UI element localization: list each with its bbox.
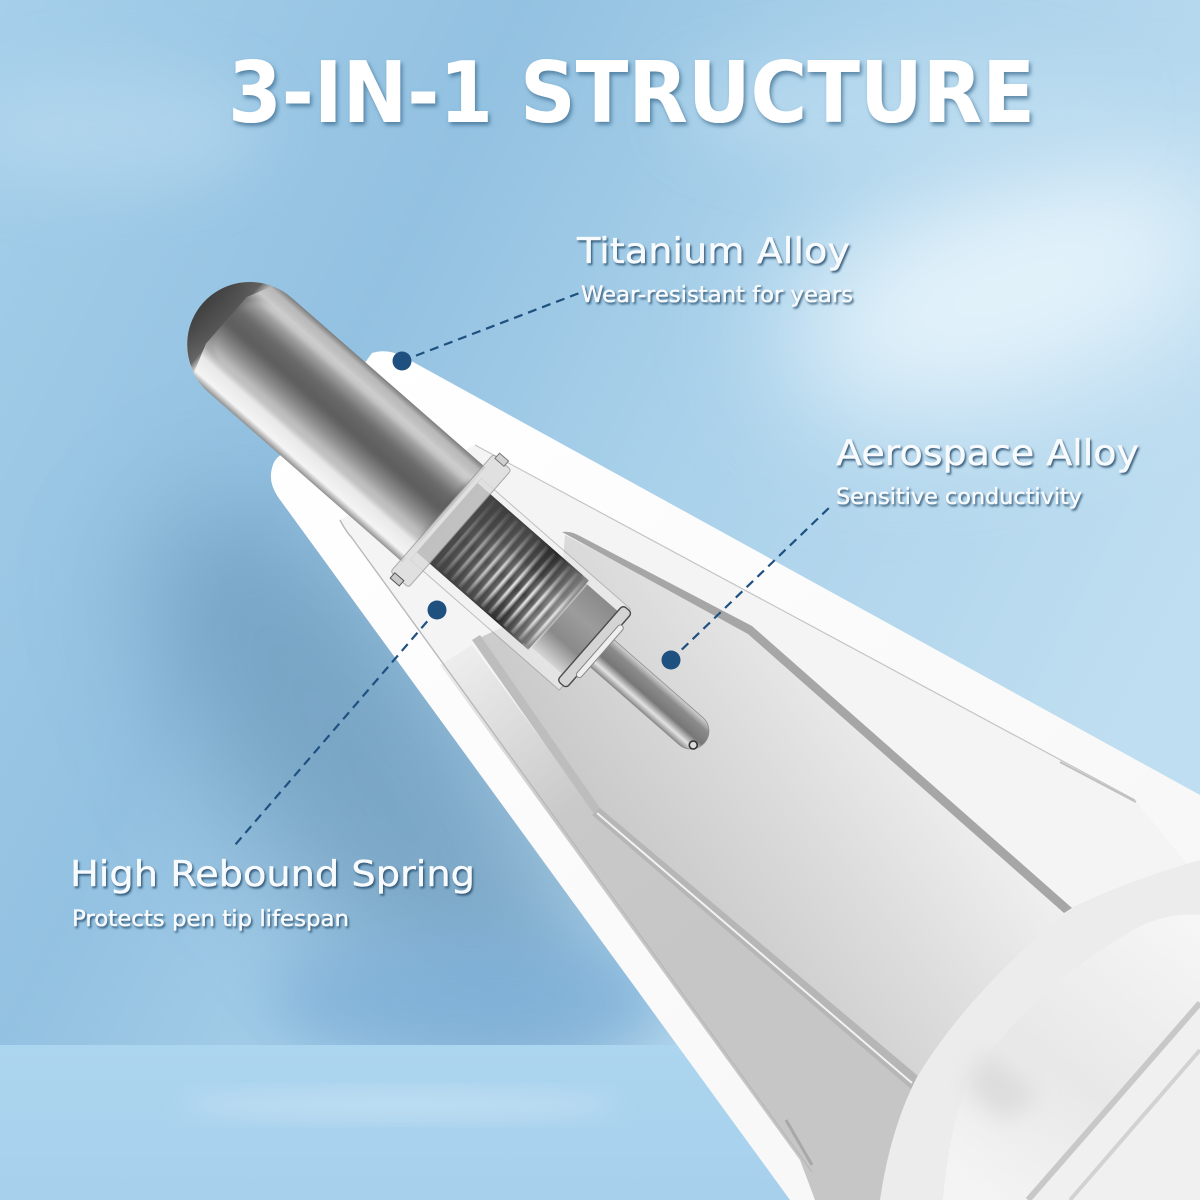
spring — [435, 500, 587, 648]
disc face — [575, 624, 625, 679]
gray cylinder — [520, 574, 625, 680]
capsule dark end — [164, 259, 272, 374]
back shade patch — [965, 1050, 1040, 1122]
ring notch bottom — [390, 573, 404, 586]
titanium capsule — [161, 256, 486, 562]
leader line — [402, 292, 582, 361]
dark inner cylinder — [417, 483, 583, 644]
marker dot — [428, 600, 446, 620]
rod — [583, 633, 716, 756]
window edge 1 — [1028, 1003, 1200, 1200]
small slit — [786, 1120, 812, 1165]
capsule inner panel — [201, 288, 470, 538]
lower slot — [592, 808, 918, 1090]
leader line — [671, 505, 832, 660]
window edge 2 — [1070, 1050, 1200, 1200]
pen nib body — [271, 351, 1200, 1200]
callout: high rebound spring — [70, 600, 475, 932]
spring shading — [427, 492, 589, 650]
transparent sleeve — [410, 478, 630, 690]
title: 3-IN-1 STRUCTURE — [228, 44, 1035, 143]
upper slot — [562, 532, 1072, 913]
label: Titanium Alloy — [576, 231, 850, 272]
upper rim line — [475, 445, 1135, 800]
lower rim line — [340, 520, 812, 1172]
right small slit — [1060, 762, 1136, 802]
disc — [557, 605, 632, 688]
sublabel: Protects pen tip lifespan — [72, 907, 349, 932]
diagonal window — [1028, 1003, 1200, 1200]
sublabel: Wear-resistant for years — [581, 283, 853, 308]
callout: titanium alloy — [392, 231, 853, 370]
spring fade — [417, 483, 590, 651]
cone shell — [271, 351, 1200, 1200]
marker dot — [392, 352, 412, 370]
lower slot highlight — [597, 813, 912, 1083]
leader line — [235, 610, 437, 845]
back collar — [880, 860, 1200, 1200]
back collar inner — [943, 915, 1200, 1200]
inner cavity — [340, 445, 1200, 1200]
metal tip assembly — [148, 241, 759, 805]
cavity shading lower — [440, 645, 915, 1200]
sublabel: Sensitive conductivity — [836, 485, 1082, 510]
label: High Rebound Spring — [70, 854, 475, 895]
cavity shading between slots — [475, 535, 1070, 1085]
lower slot wedge — [472, 635, 600, 814]
rod tip hole — [688, 739, 699, 751]
ring notch top — [495, 453, 509, 466]
callout: aerospace alloy — [662, 433, 1139, 670]
clear ring — [390, 454, 511, 587]
marker dot — [662, 650, 680, 670]
label: Aerospace Alloy — [836, 433, 1139, 474]
